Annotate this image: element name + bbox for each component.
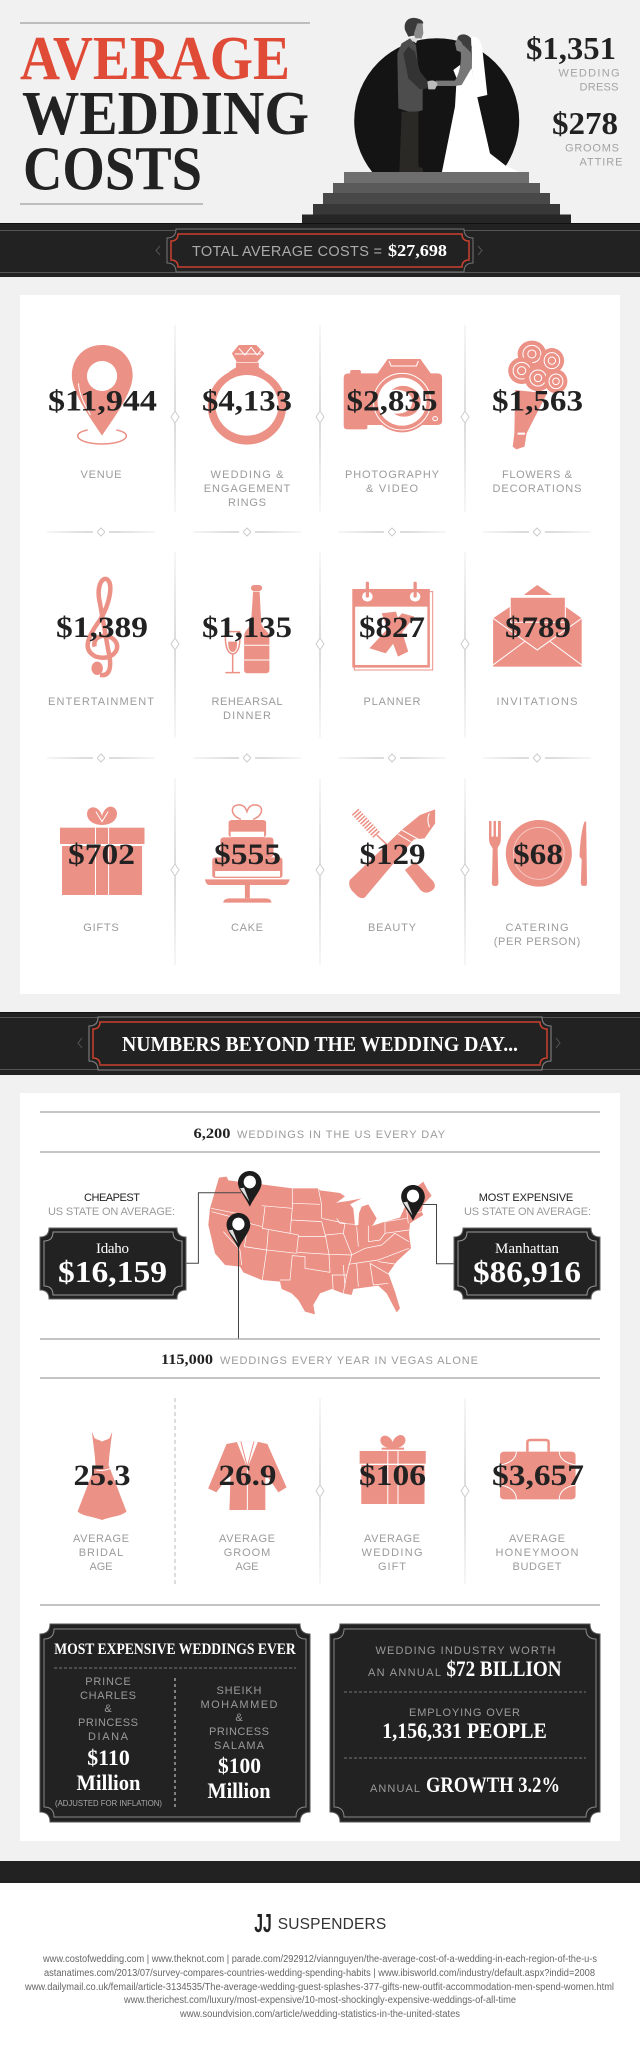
- couple: mohammed and salama: [200, 1685, 278, 1803]
- sources: www.costofwedding.com | www.theknot.com | parade.com/292912/viannguyen/the-average-cost-of-a-wedding-in-each-region-of-the-u-s: [42, 1954, 597, 1965]
- callout: cheapest: CHEAPEST: [84, 1192, 140, 1204]
- couple: mohammed and salama: SALAMA: [214, 1740, 265, 1752]
- stat: grooms attire: ATTIRE: [580, 156, 622, 168]
- stat: wedding dress: DRESS: [580, 82, 618, 94]
- plaque: most expensive weddings: [40, 1624, 310, 1822]
- couple: charles and diana: &: [104, 1703, 112, 1715]
- stat: weddings per day: 6,200: [194, 1126, 230, 1142]
- stat: grooms attire: [552, 105, 622, 168]
- callout: most expensive: $86,916: [473, 1254, 581, 1289]
- stat: wedding dress: WEDDING: [558, 68, 620, 80]
- card: bridal age: BRIDAL: [79, 1547, 123, 1559]
- card: catering: (PER PERSON): [494, 936, 580, 948]
- card: invitations: $789: [505, 611, 571, 644]
- card: beauty: $129: [360, 838, 426, 871]
- icon: calendar: [352, 582, 433, 670]
- stat: industry worth: AN ANNUAL: [368, 1667, 441, 1679]
- card: flowers: [492, 341, 583, 495]
- stat: annual growth: GROWTH 3.2%: [426, 1772, 560, 1797]
- connector: idaho: [186, 1193, 241, 1263]
- map: united states: [208, 1177, 432, 1314]
- icon: suitcase: [500, 1440, 576, 1499]
- couple: charles and diana: Million: [76, 1770, 140, 1795]
- stat: industry worth: $72 BILLION: [446, 1656, 562, 1681]
- icon: mascara and lipstick: [349, 809, 435, 898]
- logo: SUSPENDERS: [278, 1916, 386, 1933]
- card: photography: [344, 359, 442, 495]
- stat: grooms attire: $278: [552, 105, 618, 141]
- callout: cheapest: [40, 1192, 186, 1299]
- card: cake: [205, 805, 290, 934]
- pin: idaho: [238, 1171, 262, 1207]
- callout: most expensive: Manhattan: [495, 1241, 560, 1257]
- title: WEDDING: [22, 80, 309, 148]
- couple: charles and diana: PRINCESS: [78, 1717, 138, 1729]
- stat: weddings in vegas: WEDDINGS EVERY YEAR IN VEGAS ALONE: [220, 1355, 478, 1367]
- card: planner: $827: [359, 611, 425, 644]
- card: gifts: GIFTS: [83, 922, 119, 934]
- card: photography: & VIDEO: [366, 483, 418, 495]
- plaque: industry stats: [330, 1624, 600, 1822]
- couple: mohammed and salama: &: [235, 1712, 243, 1724]
- card: cake: CAKE: [231, 922, 263, 934]
- card: wedding gift: [359, 1435, 426, 1573]
- stat: employment: 1,156,331 PEOPLE: [382, 1718, 547, 1743]
- card: invitations: INVITATIONS: [496, 696, 578, 708]
- card: photography: $2,835: [346, 385, 438, 418]
- connector: manhattan: [422, 1204, 454, 1264]
- card: groom age: [208, 1442, 287, 1573]
- card: gifts: [60, 807, 145, 934]
- card: catering: CATERING: [506, 922, 568, 934]
- couple: charles and diana: DIANA: [88, 1731, 129, 1743]
- card: bridal age: AGE: [90, 1561, 112, 1573]
- total costs banner: TOTAL AVERAGE COSTS =: [192, 244, 382, 260]
- stat: weddings per day: [194, 1126, 446, 1142]
- card: honeymoon budget: AVERAGE: [509, 1533, 565, 1545]
- sources: www.soundvision.com/article/wedding-statistics-in-the-united-states: [179, 2009, 460, 2020]
- card: entertainment: $1,389: [56, 611, 148, 644]
- card: wedding gift: $106: [359, 1459, 426, 1492]
- stat: grooms attire: GROOMS: [565, 143, 619, 155]
- card: bridal age: [73, 1432, 130, 1573]
- couple: charles and diana: CHARLES: [80, 1690, 136, 1702]
- section banner: numbers beyond the wedding day: [0, 1012, 640, 1075]
- card: venue: VENUE: [80, 469, 122, 481]
- card: rehearsal dinner: DINNER: [223, 710, 271, 722]
- total costs banner: $27,698: [388, 241, 447, 260]
- icon: tiered cake: [205, 805, 290, 903]
- card: venue: $11,944: [48, 385, 157, 418]
- title: [20, 25, 309, 204]
- card: honeymoon budget: $3,657: [492, 1459, 584, 1492]
- stat: industry worth: [368, 1645, 562, 1681]
- icon: camera: [344, 359, 442, 432]
- couple: charles and diana: $110: [87, 1745, 130, 1770]
- sources: [24, 1954, 614, 2020]
- icon: bouquet: [508, 341, 567, 449]
- stat: wedding dress: [526, 30, 620, 94]
- card: bridal age: AVERAGE: [73, 1533, 129, 1545]
- card: groom age: GROOM: [224, 1547, 270, 1559]
- card: rings: [202, 345, 292, 509]
- card: groom age: AGE: [236, 1561, 258, 1573]
- title: COSTS: [23, 136, 202, 204]
- card: flowers: $1,563: [492, 385, 583, 418]
- icon: bottle and glass: [225, 585, 269, 673]
- card: entertainment: [48, 579, 154, 708]
- card: bridal age: 25.3: [74, 1459, 130, 1492]
- card: honeymoon budget: HONEYMOON: [496, 1547, 579, 1559]
- callout: most expensive: MOST EXPENSIVE: [479, 1192, 573, 1204]
- card: planner: [352, 582, 433, 708]
- couple: mohammed and salama: MOHAMMED: [200, 1699, 278, 1711]
- pin: manhattan: [401, 1185, 425, 1221]
- icon: treble clef: [88, 579, 117, 675]
- card: planner: PLANNER: [364, 696, 421, 708]
- card: cake: $555: [214, 838, 281, 871]
- icon: diamond ring: [208, 345, 286, 445]
- section banner: numbers beyond the wedding day: NUMBERS BEYOND THE WEDDING DAY...: [122, 1032, 518, 1056]
- card: groom age: 26.9: [218, 1459, 276, 1492]
- sources: astanatimes.com/2013/07/survey-compares-countries-wedding-spending-habits | www.ibisworld.com/industry/default.aspx?indid=2008: [44, 1968, 595, 1979]
- card: flowers: DECORATIONS: [492, 483, 582, 495]
- logo: JJ: [254, 1908, 272, 1938]
- pin: vegas: [227, 1213, 250, 1249]
- title: AVERAGE: [20, 25, 290, 93]
- stat: employment: [382, 1707, 547, 1743]
- card: rehearsal dinner: REHEARSAL: [212, 696, 282, 708]
- stat: weddings in vegas: [161, 1352, 478, 1368]
- icon: gift box: [360, 1435, 426, 1504]
- icon: plate and cutlery: [489, 820, 587, 887]
- card: rings: ENGAGEMENT: [204, 483, 291, 495]
- callout: cheapest: Idaho: [96, 1241, 129, 1257]
- card: invitations: [493, 585, 582, 708]
- panel: cost breakdown: [20, 295, 620, 994]
- connector: vegas: [238, 1246, 240, 1338]
- callout: most expensive: US STATE ON AVERAGE:: [464, 1206, 591, 1218]
- card: rehearsal dinner: [202, 585, 292, 722]
- total costs banner: [0, 223, 640, 277]
- stat: annual growth: [370, 1772, 560, 1797]
- card: flowers: FLOWERS &: [502, 469, 573, 481]
- header: [20, 18, 622, 225]
- couple: charles and diana: (ADJUSTED FOR INFLATION): [55, 1798, 162, 1808]
- card: photography: PHOTOGRAPHY: [345, 469, 440, 481]
- stat: weddings per day: WEDDINGS IN THE US EVERY DAY: [237, 1129, 446, 1141]
- footer band: [0, 1861, 640, 1883]
- card: wedding gift: AVERAGE: [364, 1533, 420, 1545]
- card: venue: [48, 345, 157, 481]
- card: rings: RINGS: [228, 497, 266, 509]
- couple: charles and diana: [55, 1676, 162, 1808]
- callout: cheapest: US STATE ON AVERAGE:: [48, 1206, 175, 1218]
- icon: map pin: [72, 345, 133, 444]
- card: rings: $4,133: [202, 385, 292, 418]
- illustration: bride and groom on stairs: [302, 18, 571, 225]
- stat: annual growth: ANNUAL: [370, 1783, 420, 1795]
- icon: tuxedo jacket: [208, 1442, 287, 1510]
- plaque: most expensive weddings: MOST EXPENSIVE WEDDINGS EVER: [54, 1641, 296, 1658]
- logo: [254, 1908, 386, 1938]
- card: entertainment: ENTERTAINMENT: [48, 696, 154, 708]
- callout: cheapest: $16,159: [58, 1254, 167, 1289]
- icon: envelope: [493, 585, 582, 667]
- couple: mohammed and salama: Million: [208, 1778, 270, 1803]
- card: wedding gift: WEDDING: [362, 1547, 422, 1559]
- icon: dress: [78, 1432, 127, 1520]
- card: beauty: BEAUTY: [368, 922, 417, 934]
- stat: employment: EMPLOYING OVER: [409, 1707, 520, 1719]
- card: honeymoon budget: BUDGET: [512, 1561, 562, 1573]
- callout: most expensive: [454, 1192, 600, 1299]
- card: beauty: [349, 809, 435, 934]
- card: rings: WEDDING &: [210, 469, 284, 481]
- card: gifts: $702: [68, 838, 135, 871]
- icon: gift box: [60, 807, 145, 895]
- sources: www.therichest.com/luxury/most-expensive/10-most-shockingly-expensive-weddings-of-all-time: [123, 1995, 516, 2006]
- card: groom age: AVERAGE: [219, 1533, 275, 1545]
- stat: wedding dress: $1,351: [526, 30, 616, 66]
- card: rehearsal dinner: $1,135: [202, 611, 292, 644]
- couple: mohammed and salama: PRINCESS: [209, 1726, 269, 1738]
- card: wedding gift: GIFT: [378, 1561, 406, 1573]
- couple: mohammed and salama: $100: [218, 1753, 261, 1778]
- stat: weddings in vegas: 115,000: [161, 1352, 213, 1368]
- couple: mohammed and salama: SHEIKH: [216, 1685, 262, 1697]
- stat: industry worth: WEDDING INDUSTRY WORTH: [376, 1645, 556, 1657]
- card: catering: [489, 820, 587, 948]
- footer: [0, 1883, 640, 2048]
- couple: charles and diana: PRINCE: [85, 1676, 131, 1688]
- panel: numbers: [20, 1093, 620, 1841]
- card: honeymoon budget: [492, 1440, 584, 1573]
- card: catering: $68: [513, 838, 563, 871]
